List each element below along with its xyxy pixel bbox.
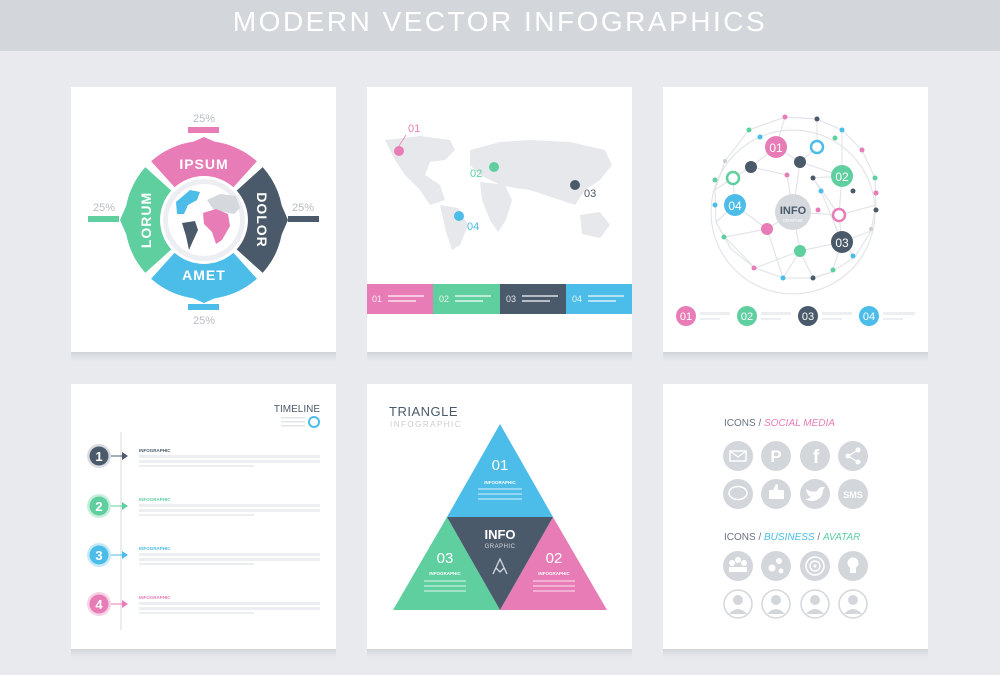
timeline item 4: 4 [95,597,103,612]
node: info center [775,194,811,230]
panel: timeline [87,404,320,630]
timeline item 2: INFOGRAPHIC [139,497,171,502]
legend row: 01 [680,311,692,323]
triangle segment 01 [447,424,553,517]
timeline item 3: INFOGRAPHIC [139,546,171,551]
ring segment: ipsum: IPSUM [179,156,229,172]
timeline item 3 [87,543,320,567]
triangle segment 02 [500,517,607,610]
triangle center: info: GRAPHIC [485,544,516,550]
timeline item 1: INFOGRAPHIC [139,448,171,453]
legend row [676,306,915,326]
map pin 01: 01 [408,123,420,135]
triangle heading: INFOGRAPHIC [390,420,462,429]
node 03: 03 [835,236,849,250]
panel: ring diagram [88,113,319,327]
label: bottom 25% [188,304,219,327]
map pin 04: 04 [467,221,479,233]
title: MODERN VECTOR INFOGRAPHICS [233,6,767,37]
map pin 02: 02 [470,168,482,180]
timeline item 4: INFOGRAPHIC [139,595,171,600]
node 01 [765,136,787,158]
triangle segment 02: INFOGRAPHIC [538,571,571,576]
timeline item 1: 1 [95,449,103,464]
social icons: f [813,447,820,468]
triangle segment 03 [393,517,500,610]
ring segment: dolor: DOLOR [254,192,270,248]
heading: business / avatar: ICONS / BUSINESS / AVATAR [724,532,860,543]
color bar strip: 04 [572,294,582,304]
label: right 25% [288,202,319,222]
heading: social media: ICONS / SOCIAL MEDIA [724,418,835,429]
color bar strip [367,284,632,314]
node 04: 04 [728,199,742,213]
triangle segment 01: INFOGRAPHIC [484,480,517,485]
node 02 [831,165,853,187]
node 02: 02 [835,170,849,184]
legend row: 04 [863,311,875,323]
triangle segment 02: 02 [546,550,562,567]
network dots [712,114,878,280]
color bar strip: 01 [372,294,382,304]
triangle center: info [447,517,553,610]
triangle segment 03: 03 [437,550,453,567]
icon: globe [163,179,245,261]
timeline item 2: 2 [95,499,103,514]
triangle heading [389,404,462,429]
network lines [711,117,876,294]
legend row: 02 [741,311,753,323]
avatar icons [724,590,867,618]
node 01: 01 [769,141,783,155]
timeline heading: TIMELINE [274,404,320,415]
node: info center: GRAPHIC [783,218,804,223]
triangle segment 03: INFOGRAPHIC [429,571,462,576]
node 04 [724,194,746,216]
header bar [0,0,1000,51]
ring segment: amet [151,253,257,303]
panel backgrounds [71,87,928,661]
map pin 04 [454,211,479,233]
map pin 03 [570,180,596,200]
triangle heading: TRIANGLE [389,404,458,419]
color bar strip: 03 [506,294,516,304]
triangle segment 01: 01 [492,457,508,474]
node: info center: INFO [780,205,807,217]
panel: network sphere [676,114,915,326]
node 03 [831,231,853,253]
dotted world map [385,136,612,250]
panel: icons [723,418,868,618]
map pin 02 [470,162,499,180]
triangle center: info: INFO [484,527,516,542]
panel: triangle [389,404,607,610]
map pin 01 [394,123,420,156]
label: top 25%: 25% [193,113,215,125]
label: right 25%: 25% [292,202,314,214]
timeline item 1 [87,444,320,468]
social icons [723,441,868,509]
ring segment: ipsum [151,137,257,187]
business icons [723,551,868,581]
ring segment: amet: AMET [182,267,226,283]
icon nodes [727,141,845,257]
timeline item 2 [87,494,320,518]
legend row: 03 [802,311,814,323]
label: bottom 25%: 25% [193,315,215,327]
ring segment: lorum: LORUM [138,192,154,248]
ring segment: lorum [120,167,171,273]
label: top 25% [188,113,219,133]
timeline item 3: 3 [95,548,103,563]
color bar strip: 02 [439,294,449,304]
timeline heading [274,404,320,428]
timeline item 4 [87,592,320,616]
map pin 03: 03 [584,188,596,200]
label: left 25%: 25% [93,202,115,214]
social icons: SMS [843,490,863,500]
panel: world map [367,123,632,314]
social icons: P [770,447,782,466]
label: left 25% [88,202,119,222]
ring segment: dolor [237,167,288,273]
